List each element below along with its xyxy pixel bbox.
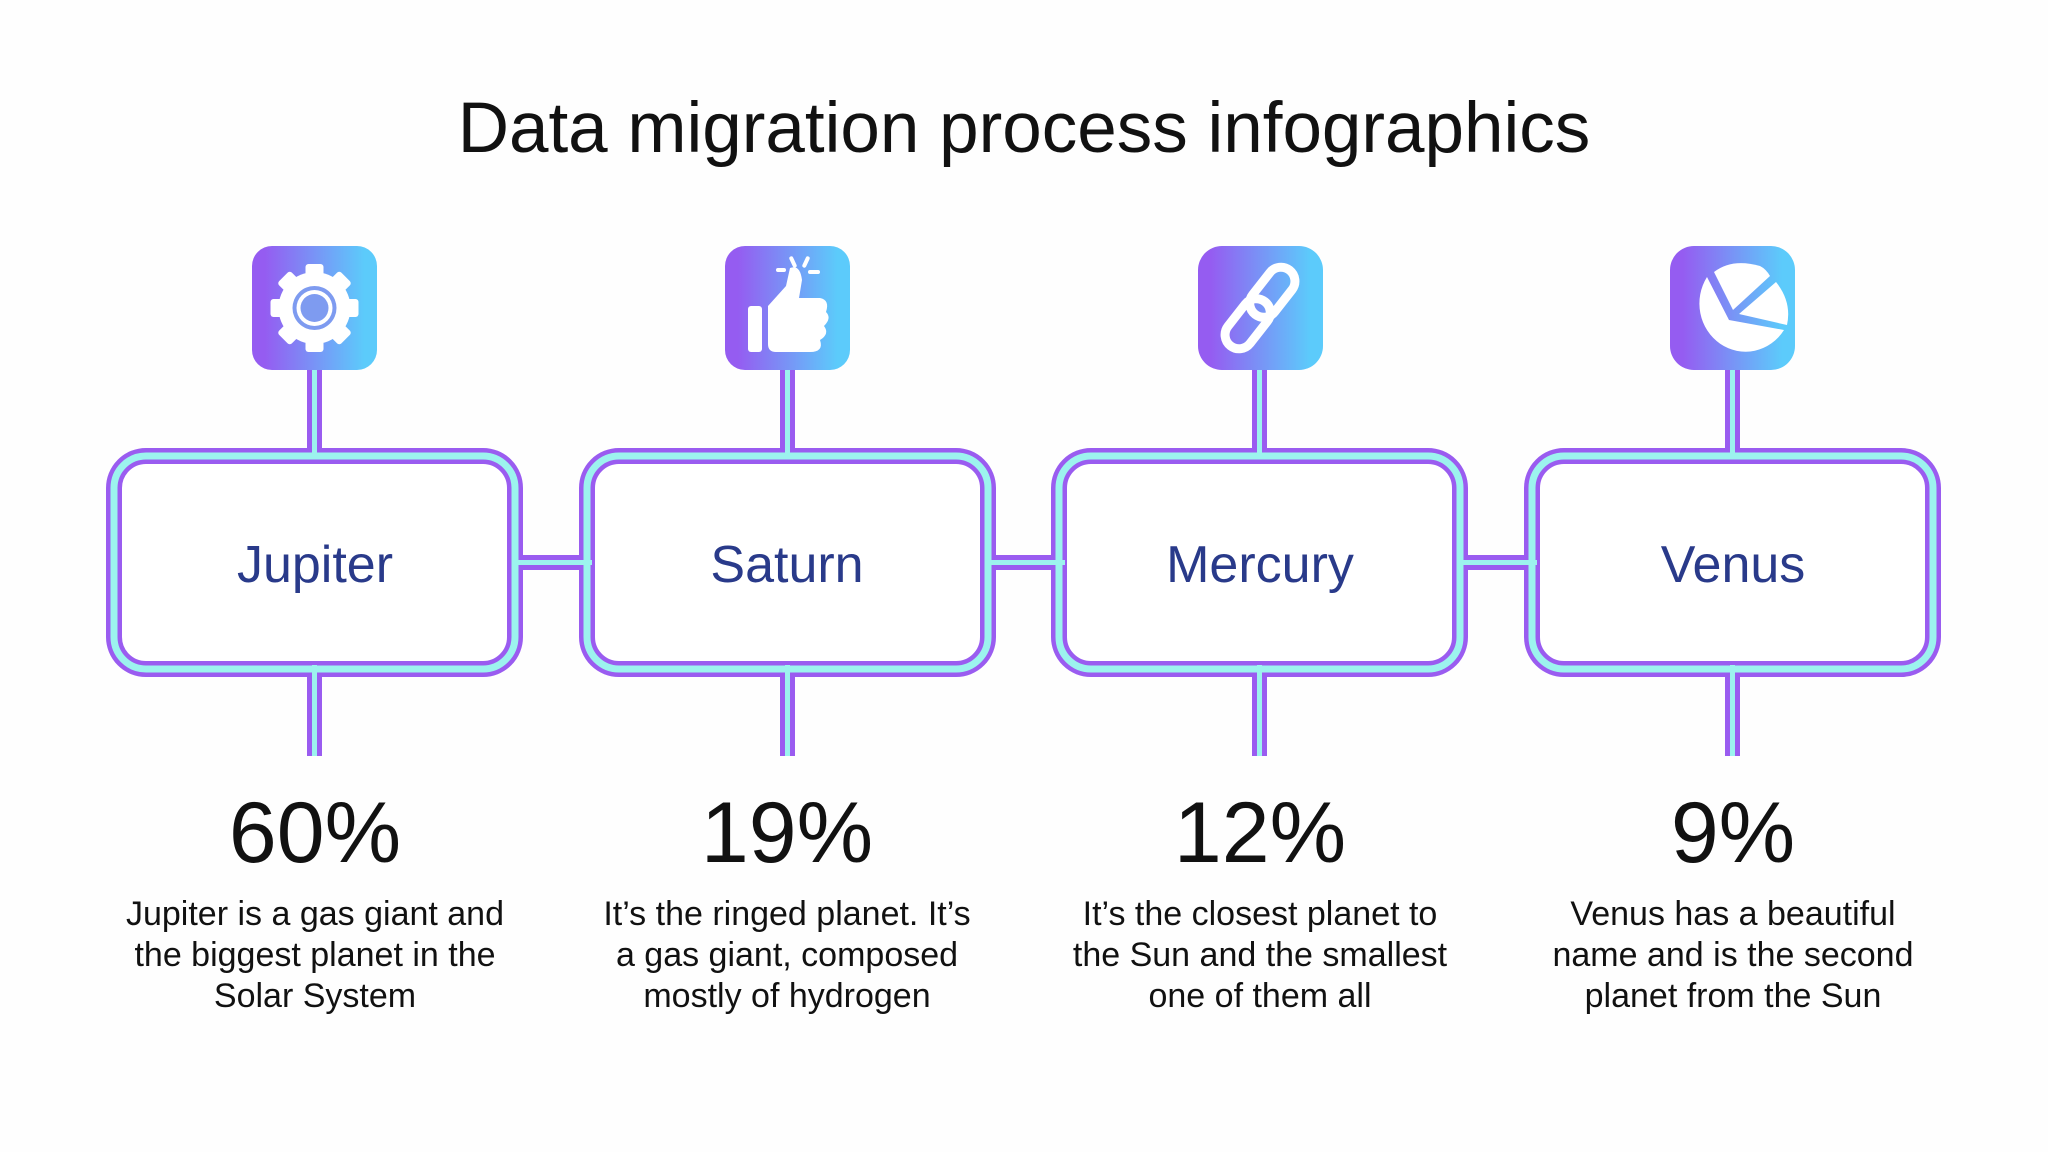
labels: Mercury — [1166, 536, 1354, 594]
percentages: 12% — [1174, 785, 1346, 881]
descriptions: Jupiter is a gas giant and — [126, 895, 504, 933]
labels: Venus — [1661, 536, 1805, 594]
descriptions: Solar System — [214, 977, 416, 1015]
percentages: 9% — [1671, 785, 1795, 881]
percentages: 60% — [229, 785, 401, 881]
descriptions: It’s the closest planet to — [1083, 895, 1437, 933]
percentages: 19% — [701, 785, 873, 881]
icon: gear — [252, 246, 377, 370]
labels: Saturn — [710, 536, 864, 594]
descriptions: a gas giant, composed — [616, 936, 958, 974]
icon: link — [1198, 246, 1323, 370]
connectors and boxes — [114, 368, 1933, 756]
descriptions: one of them all — [1148, 977, 1372, 1015]
descriptions: the Sun and the smallest — [1073, 936, 1448, 974]
title: Data migration process infographics — [458, 89, 1590, 168]
descriptions: mostly of hydrogen — [643, 977, 931, 1015]
labels — [237, 536, 1805, 594]
labels: Jupiter — [237, 536, 393, 594]
descriptions — [126, 895, 1914, 1015]
descriptions: the biggest planet in the — [134, 936, 496, 974]
descriptions: planet from the Sun — [1585, 977, 1881, 1015]
icon: pie chart — [1670, 246, 1795, 370]
percentages — [229, 785, 1795, 881]
descriptions: name and is the second — [1552, 936, 1914, 974]
descriptions: It’s the ringed planet. It’s — [603, 895, 971, 933]
icon: thumbs up — [725, 246, 850, 370]
descriptions: Venus has a beautiful — [1570, 895, 1896, 933]
